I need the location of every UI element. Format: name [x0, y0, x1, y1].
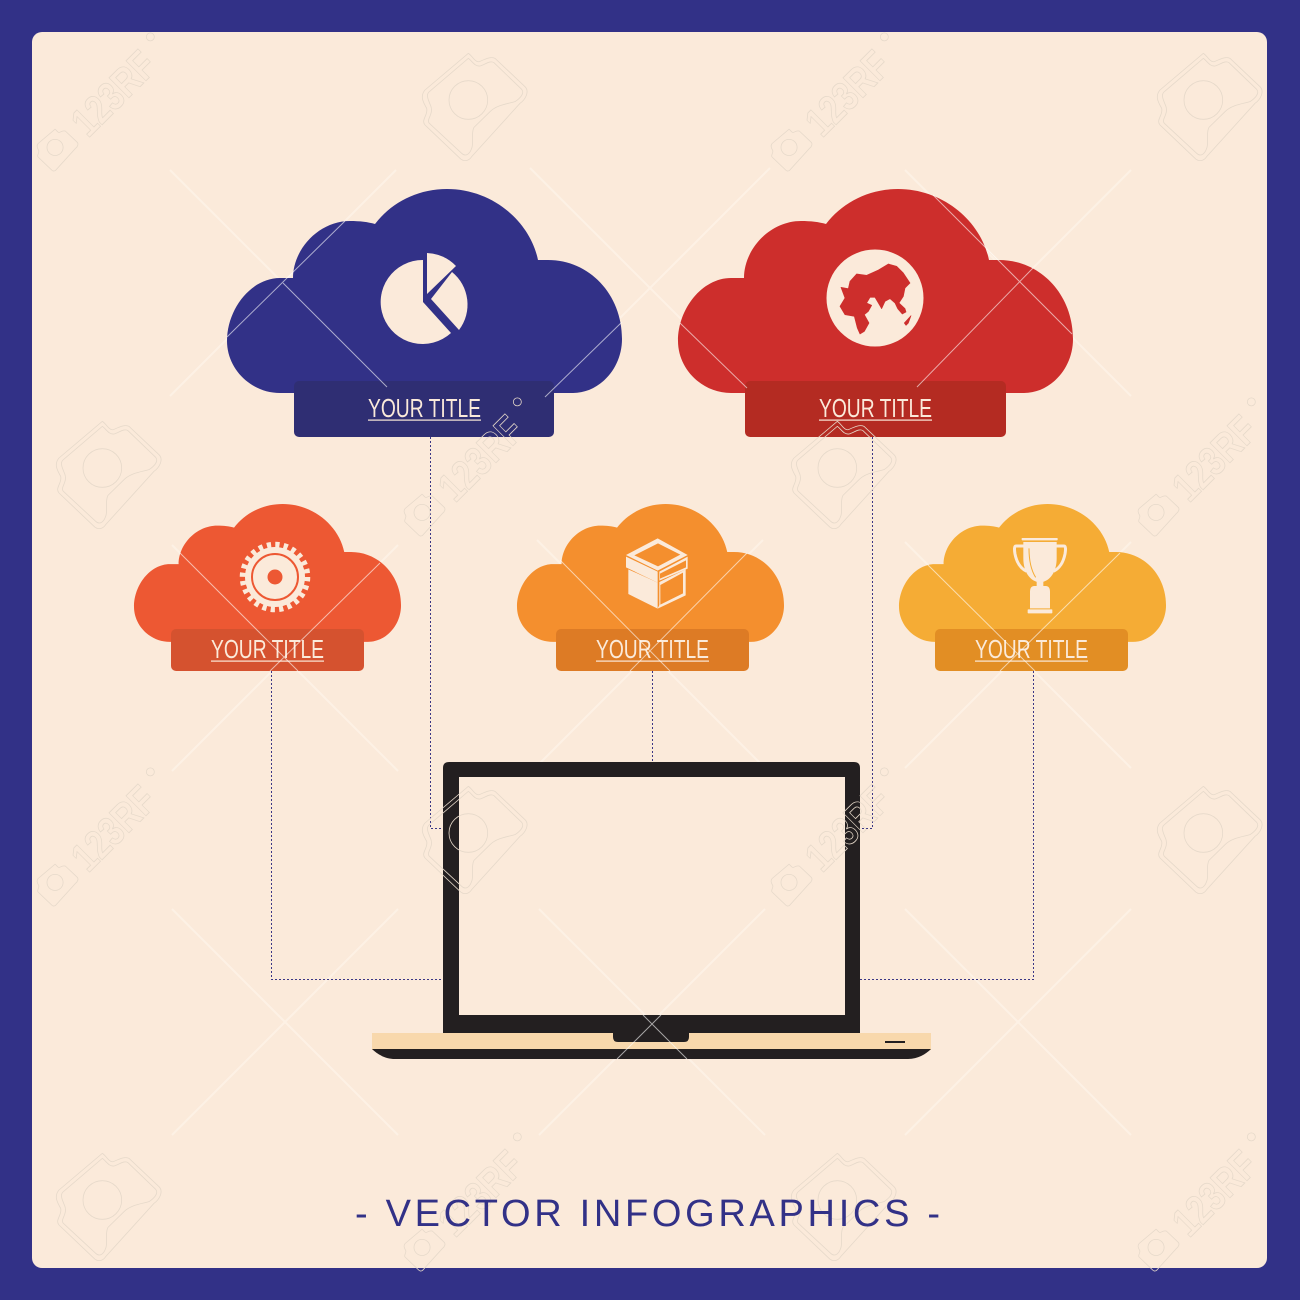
text: 123RF: [796, 777, 899, 880]
text: 123RF: [429, 407, 532, 510]
title bar: orange: YOUR TITLE: [596, 634, 709, 664]
text: 123RF: [796, 42, 899, 145]
text: 123RF: [62, 777, 165, 880]
text: 123RF: [1163, 407, 1266, 510]
panel: red cloud: [678, 189, 1073, 437]
title bar: yellow: YOUR TITLE: [975, 634, 1088, 664]
cloud shape: yellow: [899, 504, 1166, 642]
icon: box: [626, 538, 688, 609]
title bar: orange-red: YOUR TITLE: [211, 634, 324, 664]
cloud shape: orange-red: [134, 504, 401, 642]
text: 123RF: [1163, 1142, 1266, 1245]
title bar: red: [745, 381, 1006, 437]
laptop screen: [443, 762, 860, 1033]
laptop: [372, 762, 931, 1059]
icon: globe: [826, 250, 924, 346]
icon: gear: [243, 545, 307, 609]
panel: orange cloud: [517, 504, 784, 671]
panel: blue cloud: [227, 189, 622, 437]
title bar: red: YOUR TITLE: [819, 393, 932, 423]
title bar: blue: YOUR TITLE: [368, 393, 481, 423]
icon: trophy: [1014, 538, 1066, 613]
cloud shape: red: [678, 189, 1073, 393]
laptop base: [372, 1033, 931, 1059]
title bar: blue: [294, 381, 554, 437]
footer title: - VECTOR INFOGRAPHICS -: [355, 1193, 940, 1235]
title bar: orange: [556, 629, 749, 671]
title bar: orange-red: [171, 629, 364, 671]
icon: pie chart: [381, 253, 468, 344]
panel: orange-red cloud: [134, 504, 401, 671]
title bar: yellow: [935, 629, 1128, 671]
cloud shape: orange: [517, 504, 784, 642]
connector lines: dotted links from clouds to laptop: [272, 437, 1034, 980]
text: 123RF: [429, 1142, 532, 1245]
panel: yellow cloud: [899, 504, 1166, 671]
cloud shape: blue: [227, 189, 622, 393]
text: 123RF: [62, 42, 165, 145]
